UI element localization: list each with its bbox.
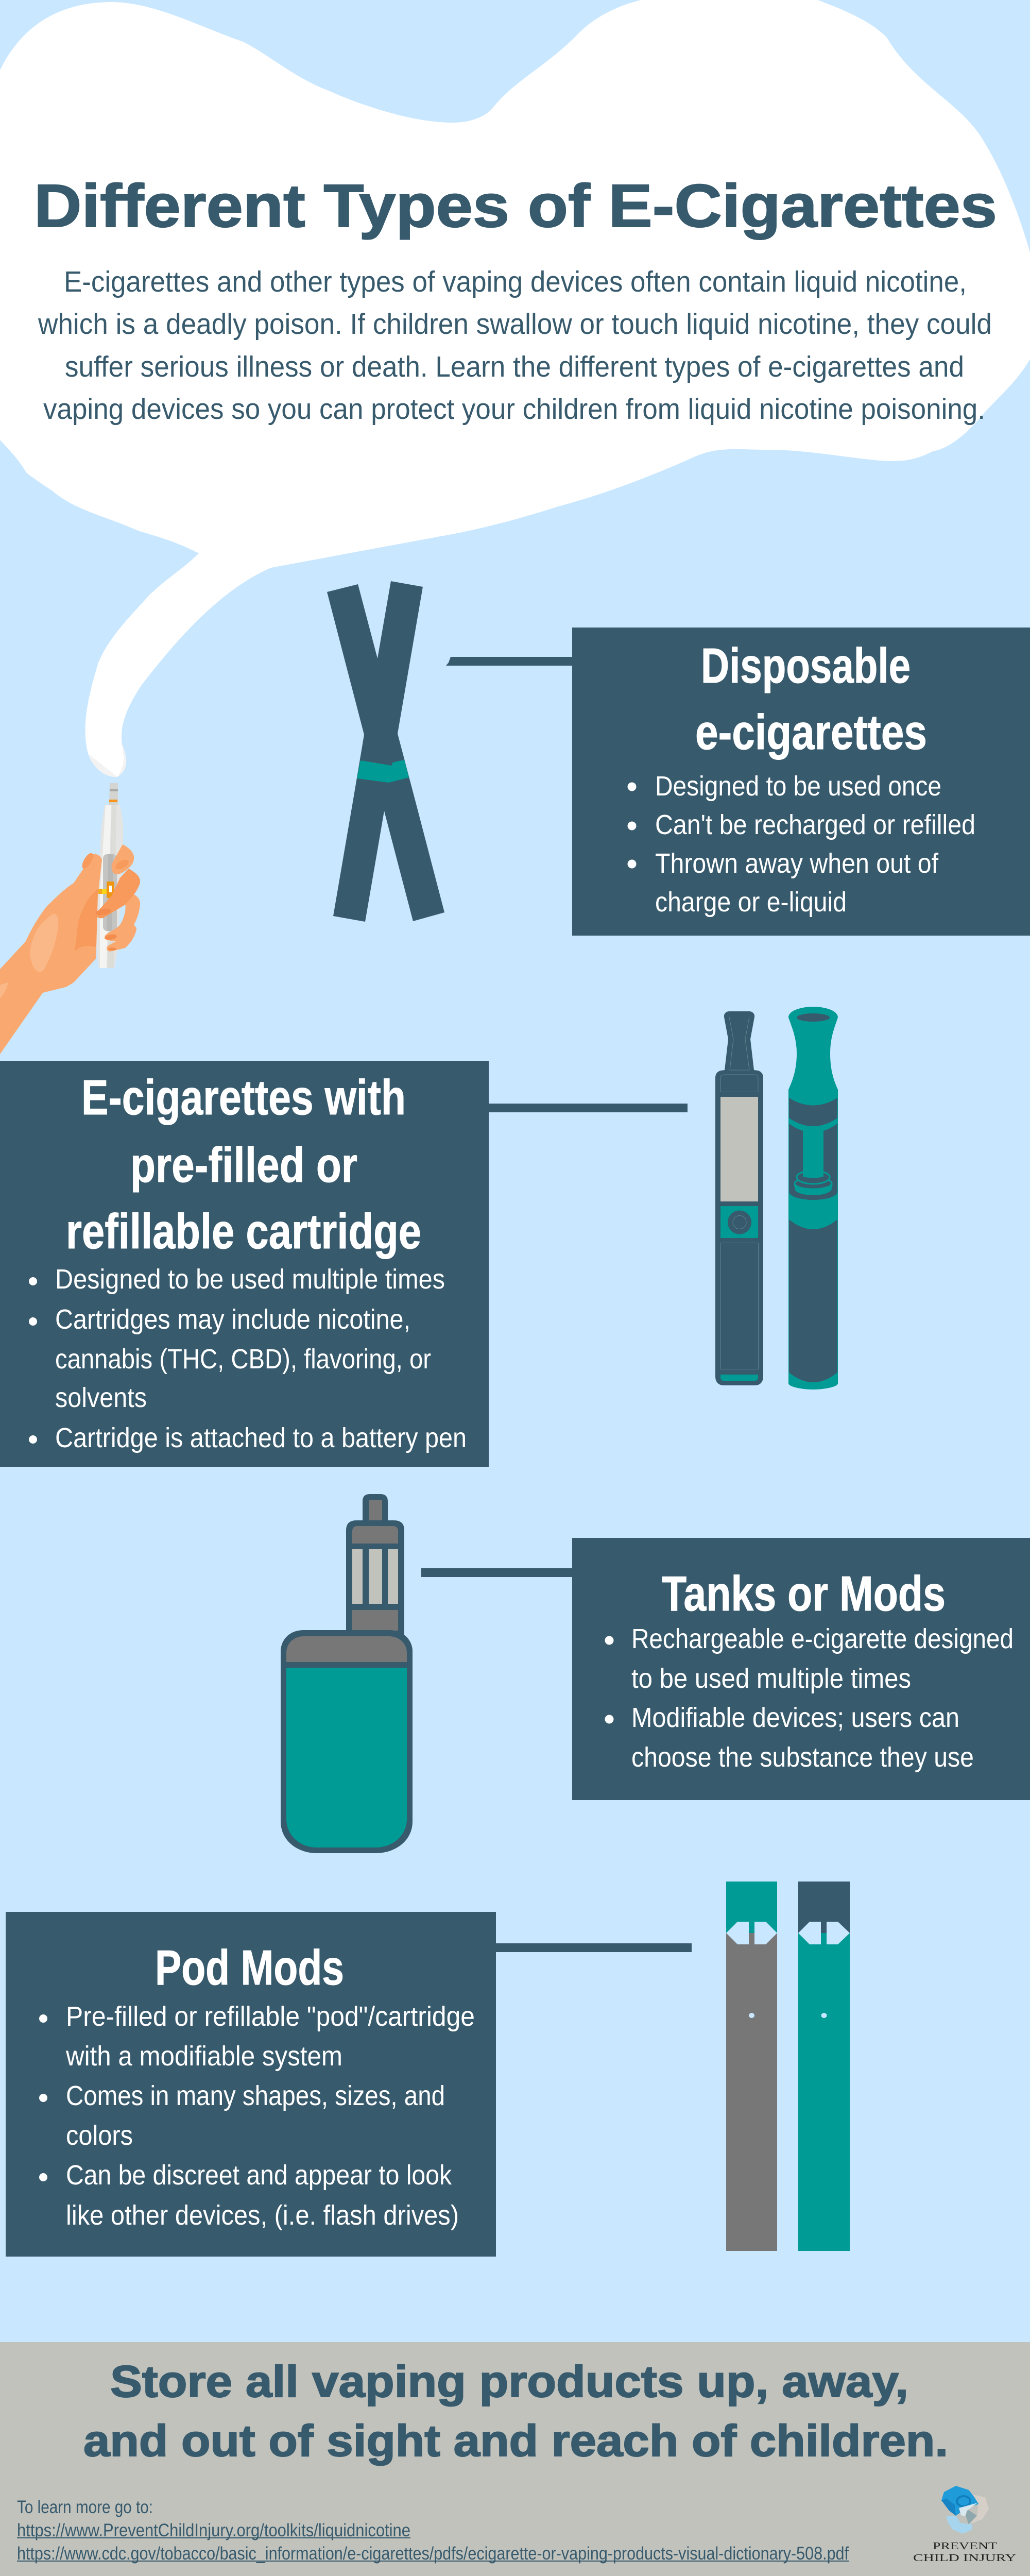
intro paragraph: suffer serious illness or death. Learn the different types of e-cigarettes and xyxy=(65,350,964,383)
connector: tanks xyxy=(421,1568,572,1577)
panel: disposable e-cigarettes: Thrown away when out of xyxy=(655,848,939,879)
panel: pod mods: Pod Mods xyxy=(155,1940,344,1995)
panel: tanks or mods xyxy=(572,1538,1030,1800)
icon: pod device teal xyxy=(798,1882,850,2251)
icon: disposable e-cigarette X xyxy=(327,581,444,922)
footer call to action: Store all vaping products up, away, xyxy=(110,2357,908,2406)
panel: pod mods: Comes in many shapes, sizes, and xyxy=(66,2080,445,2111)
logo: Prevent Child Injury: PREVENT xyxy=(933,2540,997,2552)
icon: battery pen xyxy=(715,1011,763,1385)
intro paragraph xyxy=(38,265,992,426)
panel: pre-filled or refillable cartridge: E-cigarettes with xyxy=(81,1070,406,1125)
panel: pre-filled or refillable cartridge: solvents xyxy=(55,1382,147,1413)
panel: tanks or mods: choose the substance they use xyxy=(631,1742,974,1773)
sources xyxy=(17,2497,849,2564)
connector: cartridge xyxy=(489,1104,688,1112)
icon: pod device grey xyxy=(726,1882,777,2251)
panel: disposable e-cigarettes: Designed to be used once xyxy=(655,771,941,802)
icon: box mod xyxy=(281,1494,413,1853)
icon: tank vape pen xyxy=(788,1007,838,1389)
panel: pre-filled or refillable cartridge: Cartridges may include nicotine, xyxy=(55,1304,410,1335)
intro paragraph: vaping devices so you can protect your children from liquid nicotine poisoning. xyxy=(43,393,985,426)
panel: pod mods: colors xyxy=(66,2120,133,2151)
panel: disposable e-cigarettes: Can't be recharged or refilled xyxy=(655,809,975,840)
panel: pod mods: like other devices, (i.e. flash drives) xyxy=(66,2200,459,2231)
title: Different Types of E-Cigarettes xyxy=(34,172,997,240)
logo: Prevent Child Injury: CHILD INJURY xyxy=(913,2552,1016,2564)
connector: pod mods xyxy=(496,1943,692,1952)
panel: disposable e-cigarettes xyxy=(572,628,1030,936)
panel: pre-filled or refillable cartridge: refillable cartridge xyxy=(66,1204,421,1259)
intro paragraph: E-cigarettes and other types of vaping devices often contain liquid nicotine, xyxy=(64,265,967,298)
sources: https://www.PreventChildInjury.org/toolkits/liquidnicotine xyxy=(17,2520,410,2540)
panel: tanks or mods: Modifiable devices; users can xyxy=(631,1702,959,1733)
panel: pre-filled or refillable cartridge: Cartridge is attached to a battery pen xyxy=(55,1422,467,1453)
logo: Prevent Child Injury xyxy=(913,2486,1016,2564)
sources: https://www.cdc.gov/tobacco/basic_information/e-cigarettes/pdfs/ecigarette-or-vaping-products-visual-dictionary-508.pdf xyxy=(17,2544,849,2564)
panel: disposable e-cigarettes: Disposable xyxy=(701,638,911,693)
panel: pre-filled or refillable cartridge: Designed to be used multiple times xyxy=(55,1264,445,1295)
speech bubble: smoke cloud xyxy=(0,0,1030,777)
sources: To learn more go to: xyxy=(17,2497,153,2517)
illustration: hand holding vape xyxy=(0,783,140,1054)
footer band xyxy=(0,2342,1030,2576)
panel: pre-filled or refillable cartridge xyxy=(0,1061,489,1467)
panel: pod mods xyxy=(6,1912,496,2257)
connector: disposable xyxy=(446,657,573,666)
footer call to action: and out of sight and reach of children. xyxy=(83,2416,948,2466)
panel: disposable e-cigarettes: e-cigarettes xyxy=(695,705,927,760)
panel: pod mods: with a modifiable system xyxy=(65,2041,342,2072)
panel: tanks or mods: to be used multiple times xyxy=(631,1663,911,1694)
panel: disposable e-cigarettes: charge or e-liquid xyxy=(655,887,847,918)
footer call to action xyxy=(83,2357,948,2466)
panel: pod mods: Can be discreet and appear to look xyxy=(66,2160,452,2191)
panel: pre-filled or refillable cartridge: cannabis (THC, CBD), flavoring, or xyxy=(55,1344,431,1375)
panel: tanks or mods: Tanks or Mods xyxy=(662,1566,946,1621)
panel: pod mods: Pre-filled or refillable "pod"/cartridge xyxy=(66,2001,475,2032)
panel: pre-filled or refillable cartridge: pre-filled or xyxy=(130,1138,357,1193)
